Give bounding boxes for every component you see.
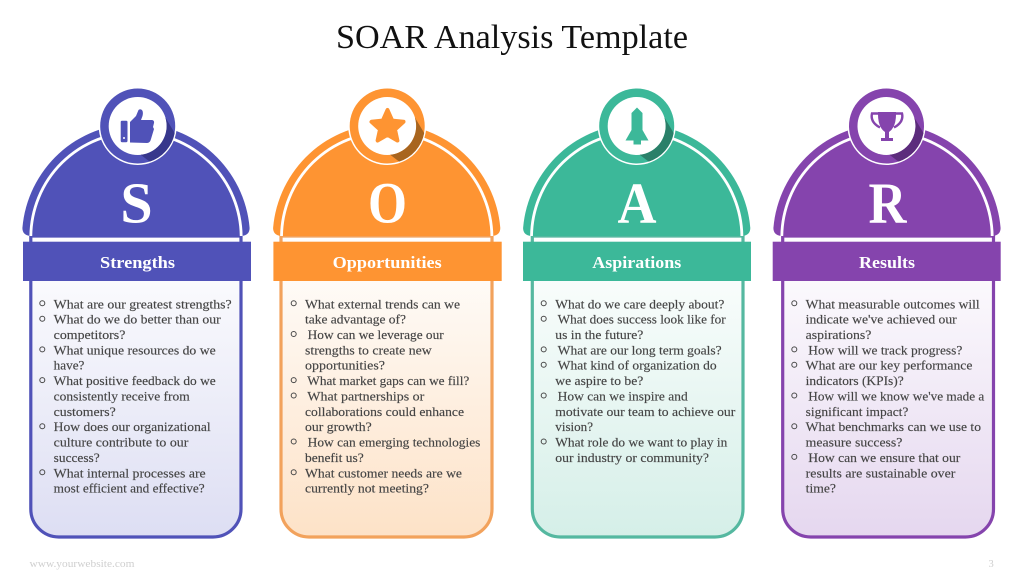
questions: opportunities: How can we leverage our [308,328,445,342]
questions: strengths: What unique resources do we [54,343,216,357]
letter O: O [368,170,407,236]
questions: strengths: customers? [54,405,116,419]
questions: opportunities: benefit us? [305,451,364,465]
footer: website: www.yourwebsite.com [30,559,134,570]
icon: thumbs up in circle [99,87,177,165]
questions: aspirations: What kind of organization do [558,359,717,373]
questions: results: What are our key performance [806,359,973,373]
questions: results: aspirations? [806,328,872,342]
questions: results: indicate we've achieved our [806,313,958,327]
questions: results: How will we know we've made a [808,390,985,404]
letter A: A [618,170,657,236]
questions: aspirations: our industry or community? [555,451,709,465]
questions: strengths: What positive feedback do we [54,374,216,388]
questions: opportunities: What partnerships or [307,390,425,404]
questions: aspirations: What are our long term goals? [558,343,722,357]
question card: strengths [31,236,241,537]
questions: opportunities: How can emerging technologies [308,436,481,450]
questions: strengths: success? [54,451,100,465]
heading band: results: Results [859,253,916,272]
heading band: strengths [23,242,251,281]
questions: aspirations: How can we inspire and [558,390,688,404]
dome: aspirations [523,124,750,236]
questions: strengths: What internal processes are [54,466,206,480]
questions: results: What benchmarks can we use to [806,420,981,434]
letter S: S [120,170,153,236]
icon: rocket in circle [598,87,676,165]
heading band: aspirations: Aspirations [592,253,682,272]
heading band: results [773,242,1001,281]
questions: aspirations [541,297,736,465]
questions: aspirations: we aspire to be? [555,374,644,388]
questions: results: results are sustainable over [806,466,956,480]
questions: aspirations: What does success look like for [558,313,727,327]
questions: aspirations: What role do we want to play in [555,436,728,450]
questions: results [792,297,985,496]
questions: strengths: consistently receive from [54,390,190,404]
questions: strengths [40,297,232,496]
questions: strengths: have? [54,359,85,373]
questions: aspirations: us in the future? [555,328,644,342]
question card: opportunities [281,236,492,537]
questions: opportunities: What customer needs are we [305,466,462,480]
questions: strengths: culture contribute to our [54,436,189,450]
dome: results [773,124,1001,236]
panel: strengths [22,87,251,537]
questions: results: How will we track progress? [808,343,963,357]
questions: opportunities: opportunities? [305,359,385,373]
question card: aspirations [532,236,743,537]
questions: strengths: What are our greatest strengths? [54,297,232,311]
panel: aspirations [523,87,751,537]
questions: strengths: most efficient and effective? [54,482,205,496]
questions: opportunities [291,297,481,496]
questions: opportunities: What external trends can we [305,297,460,311]
questions: opportunities: What market gaps can we fill? [307,374,470,388]
questions: strengths: How does our organizational [54,420,211,434]
questions: results: measure success? [806,436,903,450]
heading band: strengths: Strengths [100,253,176,272]
question card: results [783,236,994,537]
questions: results: time? [806,482,836,496]
questions: results: How can we ensure that our [808,451,961,465]
icon: trophy in circle [848,87,926,165]
letter R: R [868,170,908,236]
questions: results: significant impact? [806,405,909,419]
questions: strengths: What do we do better than our [54,313,222,327]
questions: opportunities: take advantage of? [305,313,406,327]
footer: page number: 3 [988,559,994,570]
questions: aspirations: motivate our team to achieve our [555,405,736,419]
questions: opportunities: currently not meeting? [305,482,429,496]
panel: results [773,87,1001,537]
questions: aspirations: What do we care deeply about? [555,297,725,311]
title: SOAR Analysis Template [336,19,688,56]
panel: opportunities [273,87,502,537]
dome: opportunities [273,124,500,236]
questions: results: What measurable outcomes will [806,297,980,311]
questions: opportunities: collaborations could enhance [305,405,464,419]
heading band: opportunities [273,242,502,281]
questions: aspirations: vision? [555,420,593,434]
questions: opportunities: strengths to create new [305,343,433,357]
heading band: aspirations [523,242,751,281]
icon: star in circle [348,87,426,165]
heading band: opportunities: Opportunities [333,253,442,272]
questions: strengths: competitors? [54,328,126,342]
dome: strengths [22,124,250,236]
questions: opportunities: our growth? [305,420,372,434]
questions: results: indicators (KPIs)? [806,374,904,388]
